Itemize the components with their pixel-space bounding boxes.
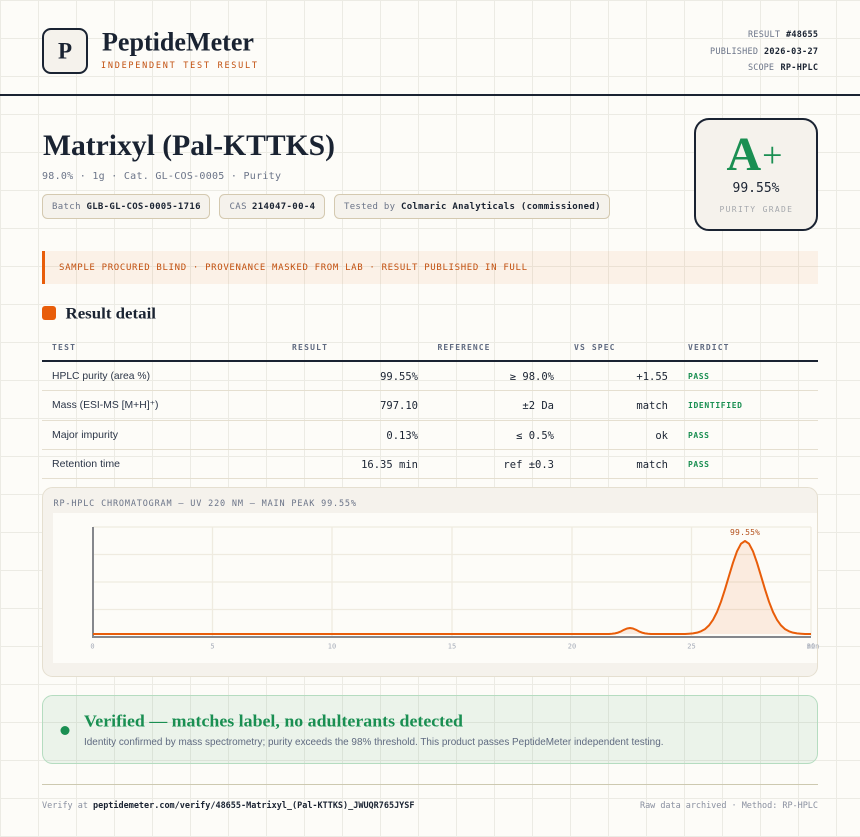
row: mass: ±2 Da xyxy=(522,400,554,412)
grade letter: A xyxy=(726,128,761,181)
row: mass: IDENTIFIED xyxy=(688,401,742,410)
row: mass: 797.10 xyxy=(380,400,418,412)
header rule xyxy=(0,94,860,96)
row: major impurity: ok xyxy=(655,430,669,442)
row: retention time: 16.35 min xyxy=(361,459,418,471)
x axis ticks: min xyxy=(807,642,819,650)
minor peak fill and main peak fill xyxy=(609,541,805,634)
result metadata: RESULT xyxy=(748,30,780,40)
table header: VERDICT xyxy=(688,343,729,352)
archive note: Raw data archived · Method: RP-HPLC xyxy=(640,801,818,811)
chromatogram trace xyxy=(93,541,811,634)
y and x axes xyxy=(93,527,811,637)
chip: tested by: Colmaric Analyticals (commissioned) xyxy=(401,201,600,212)
result metadata: RP-HPLC xyxy=(780,63,818,73)
row: retention time: PASS xyxy=(688,460,709,469)
result metadata xyxy=(710,30,818,73)
verdict detail: Identity confirmed by mass spectrometry; purity exceeds the 98% threshold. This product passes PeptideMeter independent testing. xyxy=(84,737,664,748)
row: HPLC purity: HPLC purity (area %) xyxy=(52,370,150,382)
table header xyxy=(42,343,818,362)
row: major impurity: ≤ 0.5% xyxy=(516,430,555,442)
row: mass xyxy=(42,399,818,421)
logo: P mark xyxy=(43,29,87,73)
brand name: PeptideMeter xyxy=(102,28,254,56)
verdict heading: Verified — matches label, no adulterants detected xyxy=(84,712,464,730)
chart title: RP-HPLC CHROMATOGRAM — UV 220 NM — MAIN PEAK 99.55% xyxy=(54,499,356,509)
table header: REFERENCE xyxy=(438,343,490,352)
brand tagline: INDEPENDENT TEST RESULT xyxy=(101,61,257,71)
notice banner: SAMPLE PROCURED BLIND · PROVENANCE MASKED FROM LAB · RESULT PUBLISHED IN FULL xyxy=(59,263,527,273)
result metadata: SCOPE xyxy=(748,63,774,73)
table header: RESULT xyxy=(292,343,327,352)
chip: CAS: CAS xyxy=(230,202,246,212)
x axis ticks: 10 xyxy=(328,642,336,650)
chip: batch: Batch xyxy=(52,202,80,212)
peak label: 99.55% xyxy=(730,528,760,537)
chart plot xyxy=(53,513,819,663)
purity value: 99.55% xyxy=(732,181,780,196)
chip: batch: GLB-GL-COS-0005-1716 xyxy=(86,202,200,212)
verdict callout xyxy=(42,696,818,764)
table header: TEST xyxy=(52,343,75,352)
row: retention time xyxy=(42,458,818,479)
grade card xyxy=(695,119,817,230)
result metadata: #48655 xyxy=(786,30,818,40)
x axis ticks: 20 xyxy=(568,642,576,650)
chip: tested by xyxy=(334,194,610,218)
row: retention time: ref ±0.3 xyxy=(503,459,554,471)
icon: status dot xyxy=(60,726,70,735)
row: major impurity xyxy=(42,429,818,450)
product subtitle: 98.0% · 1g · Cat. GL-COS-0005 · Purity xyxy=(42,171,281,182)
footer xyxy=(42,784,818,811)
logo: P mark: P xyxy=(58,38,72,64)
row: major impurity: Major impurity xyxy=(52,429,119,441)
row: HPLC purity: +1.55 xyxy=(636,371,668,383)
result metadata: PUBLISHED xyxy=(710,47,758,57)
row: HPLC purity: PASS xyxy=(688,372,709,381)
result metadata: 2026-03-27 xyxy=(764,47,818,57)
row: HPLC purity: ≥ 98.0% xyxy=(510,371,555,383)
table header: VS SPEC xyxy=(574,343,615,352)
purity label: PURITY GRADE xyxy=(720,205,792,214)
product summary xyxy=(42,129,610,218)
section heading: Result detail xyxy=(66,306,157,322)
header xyxy=(0,28,860,96)
x axis ticks: 0 xyxy=(90,642,95,650)
x axis ticks: 5 xyxy=(210,642,215,650)
row: retention time: match xyxy=(636,459,668,471)
chip: batch xyxy=(42,194,210,218)
verification link: Verify at xyxy=(42,801,88,811)
grade letter: + xyxy=(762,135,782,175)
panel: chromatogram xyxy=(42,488,819,676)
x axis ticks xyxy=(90,642,819,650)
results table xyxy=(42,343,818,479)
row: HPLC purity: 99.55% xyxy=(380,371,419,383)
verification link: peptidemeter.com/verify/48655-Matrixyl_(Pal-KTTKS)_JWUQR765JYSF xyxy=(93,800,414,811)
row: retention time: Retention time xyxy=(52,458,120,470)
chip: CAS: 214047-00-4 xyxy=(252,202,316,212)
x axis ticks: 15 xyxy=(448,642,456,650)
row: HPLC purity xyxy=(42,370,818,391)
chip: CAS xyxy=(220,194,324,218)
x axis ticks: 25 xyxy=(687,642,696,650)
row: mass: Mass (ESI-MS [M+H]⁺) xyxy=(52,399,158,411)
notice banner xyxy=(42,251,818,284)
chip: tested by: Tested by xyxy=(344,202,396,212)
x axis ticks: 30 xyxy=(807,642,815,650)
row: major impurity: PASS xyxy=(688,431,709,440)
row: major impurity: 0.13% xyxy=(386,430,419,442)
product title: Matrixyl (Pal-KTTKS) xyxy=(43,129,335,162)
row: mass: match xyxy=(636,400,668,412)
